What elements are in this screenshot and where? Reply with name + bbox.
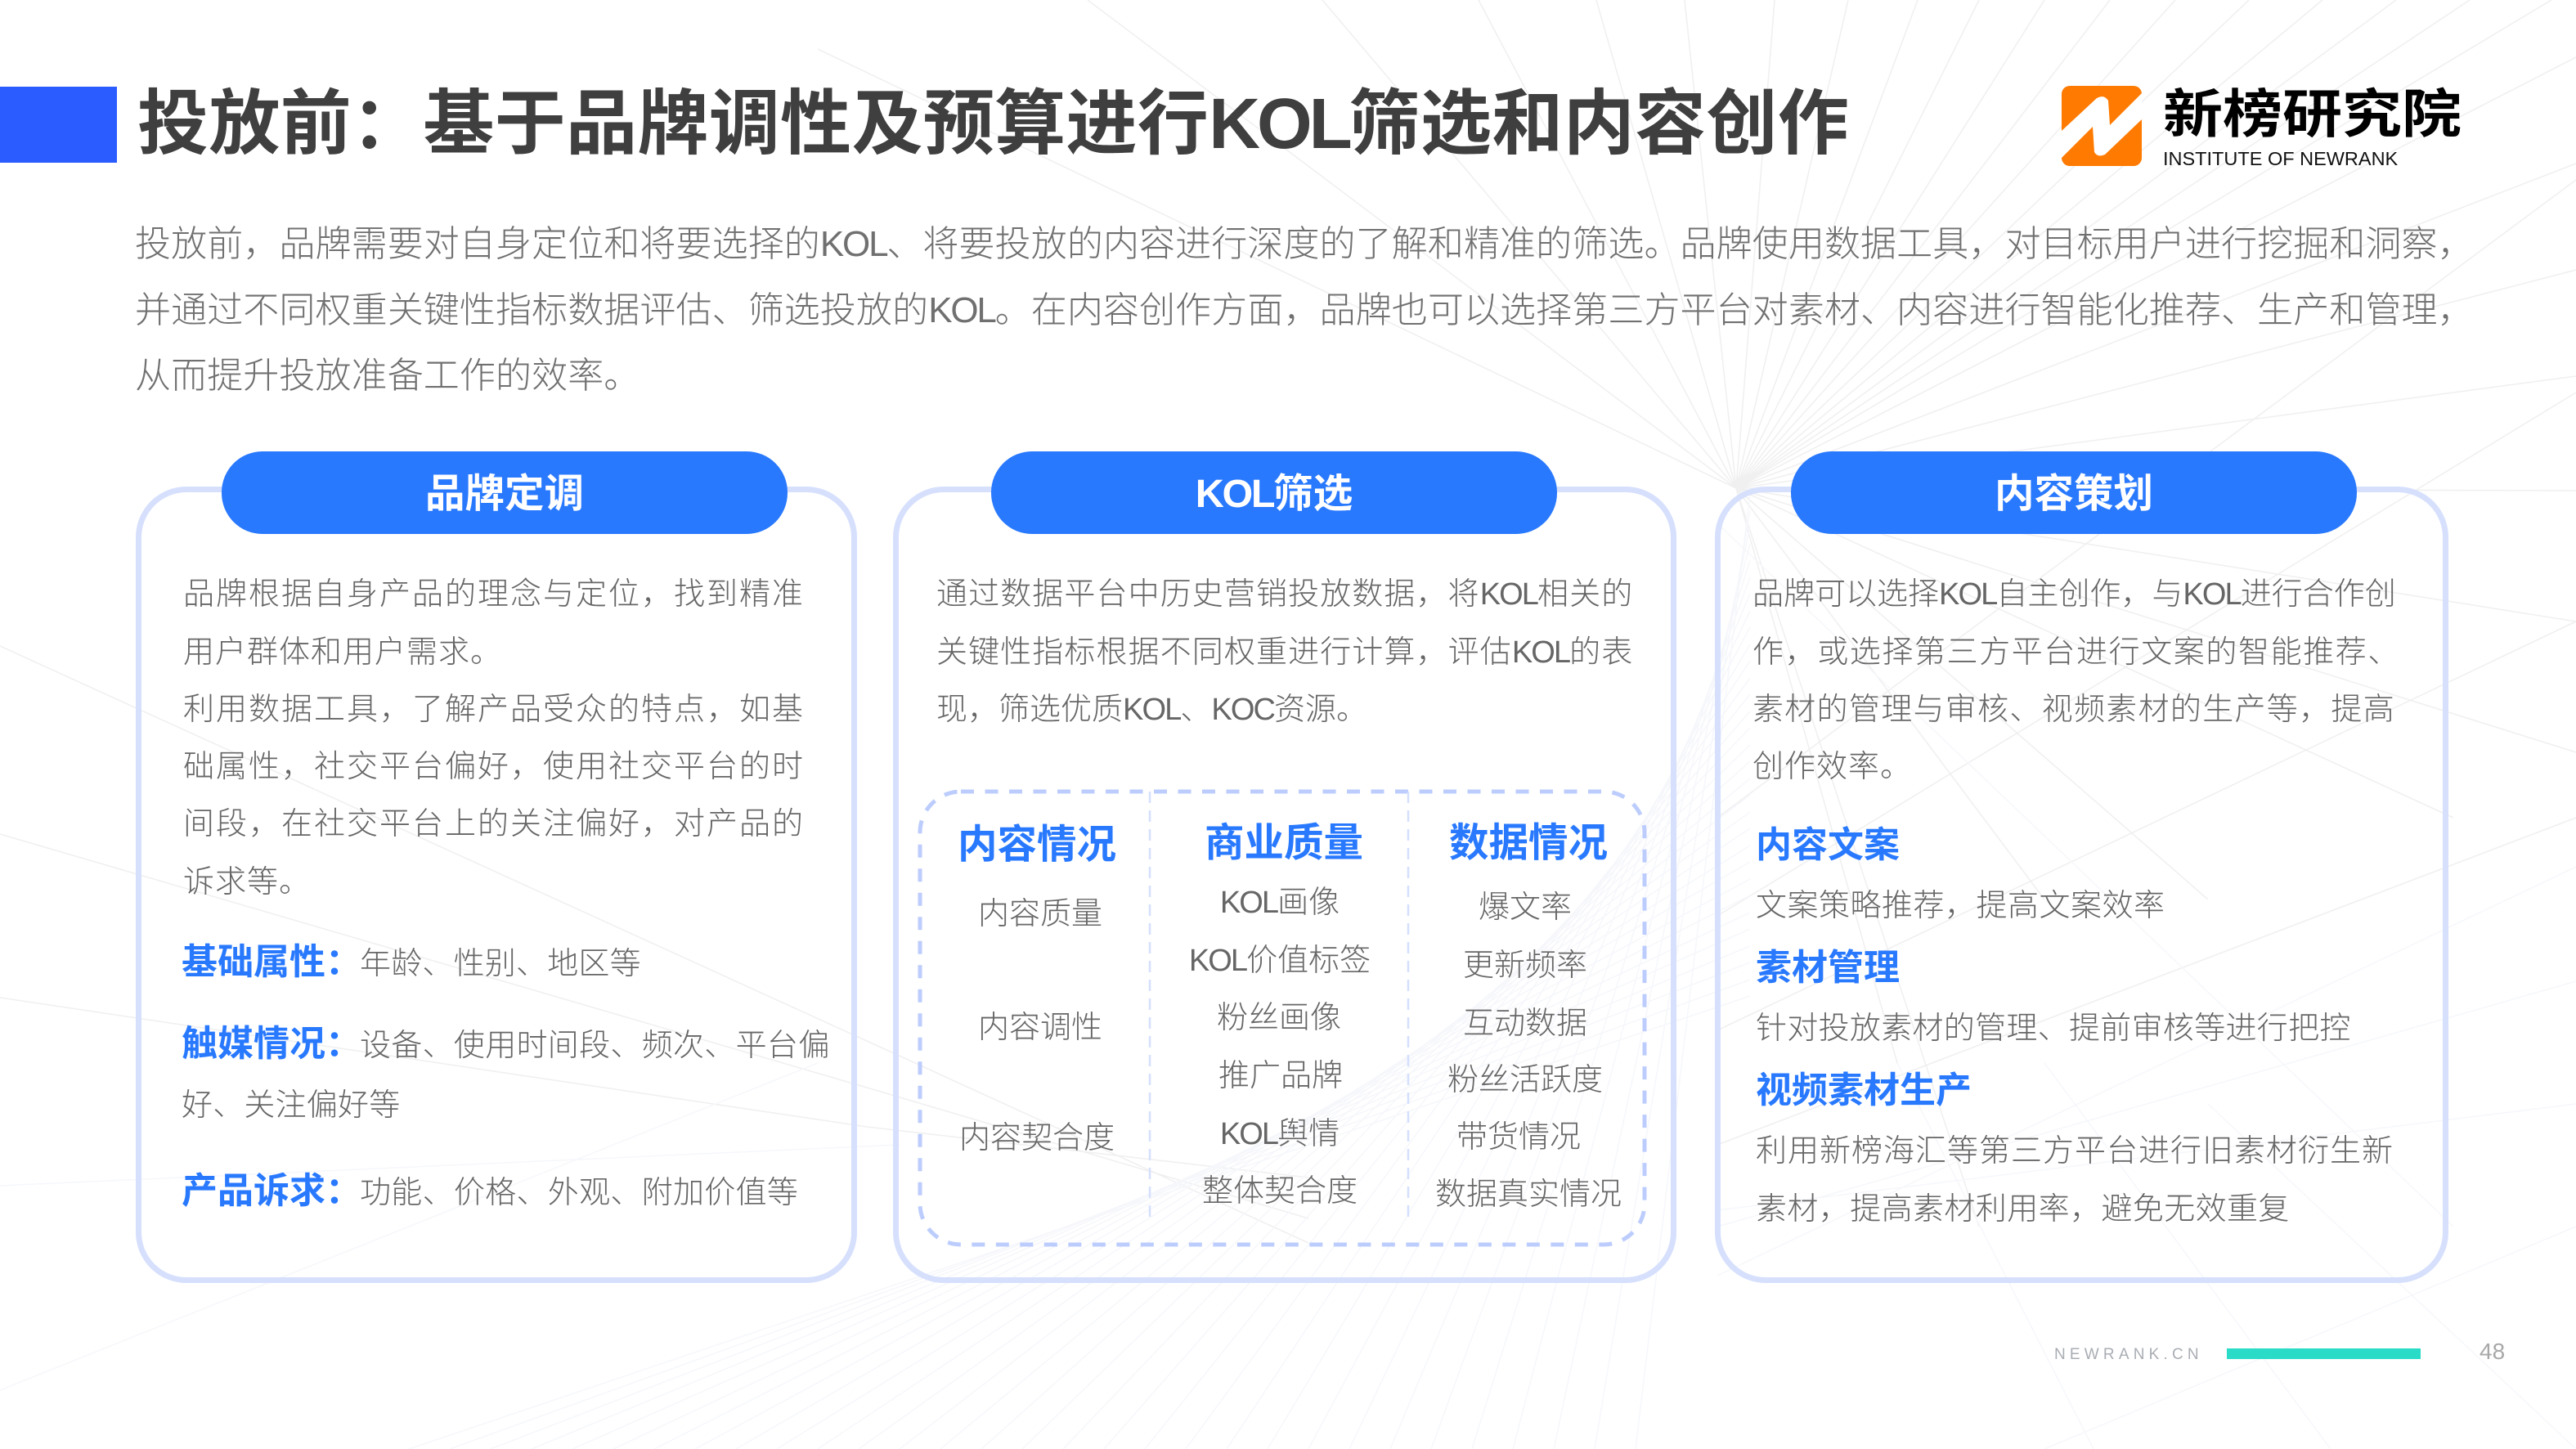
text block: brand description — [183, 577, 805, 899]
text: 触媒情况: 触媒情况： — [182, 1024, 361, 1064]
text block: brand description: 品牌根据自身产品的理念与定位，找到精准 — [183, 577, 805, 612]
text block: brand description: 间段，在社交平台上的关注偏好，对产品的 — [183, 807, 805, 841]
section: 素材管理 — [1756, 948, 2351, 1046]
text block: KOL screening description: 现，筛选优质KOL、KOC资源。 — [936, 693, 1367, 727]
section: 内容文案: 内容文案 — [1756, 825, 1900, 865]
text block: content planning description: 素材的管理与审核、视频素材的生产等，提高 — [1752, 693, 2395, 727]
column: 商业质量 — [1189, 821, 1371, 1209]
text block: brand description: 用户群体和用户需求。 — [183, 635, 502, 670]
footer: teal progress bar — [2227, 1348, 2421, 1359]
section: 素材管理: 针对投放素材的管理、提前审核等进行把控 — [1756, 1012, 2351, 1046]
column: 数据情况: 数据情况 — [1449, 821, 1608, 865]
panel heading pill: 品牌定调 — [222, 451, 788, 534]
text: 触媒情况: 好、关注偏好等 — [182, 1088, 400, 1123]
column: 商业质量: 粉丝画像 — [1217, 1001, 1341, 1035]
column: 数据情况: 数据真实情况 — [1435, 1178, 1622, 1212]
panel heading pill: 内容策划 — [1791, 451, 2357, 534]
text block: brand description: 础属性，社交平台偏好，使用社交平台的时 — [183, 750, 805, 784]
logo: Institute of Newrank — [2062, 86, 2462, 169]
panel: KOL筛选 — [893, 451, 1676, 1283]
panel heading pill: KOL筛选: KOL筛选 — [1196, 472, 1353, 516]
column: 数据情况: 带货情况 — [1456, 1120, 1581, 1155]
intro paragraph: 并通过不同权重关键性指标数据评估、筛选投放的KOL。在内容创作方面，品牌也可以选择第三方平台对素材、内容进行智能化推荐、生产和管理， — [135, 290, 2474, 330]
panel heading pill: 品牌定调: 品牌定调 — [425, 472, 584, 516]
text: 基础属性 — [182, 942, 641, 982]
footer: page number: 48 — [2480, 1339, 2505, 1364]
footer: site name: NEWRANK.CN — [2054, 1346, 2203, 1363]
column: 内容情况: 内容调性 — [978, 1011, 1102, 1045]
column: 内容情况: 内容质量 — [978, 897, 1102, 931]
title accent bar — [0, 87, 117, 163]
text: 产品诉求 — [182, 1171, 798, 1211]
column: 商业质量: 整体契合度 — [1202, 1174, 1358, 1209]
text block: KOL screening description: 关键性指标根据不同权重进行计算，评估KOL的表 — [936, 635, 1633, 670]
column: 商业质量: 商业质量 — [1205, 821, 1363, 865]
text block: brand description: 诉求等。 — [183, 865, 311, 899]
column: 数据情况: 爆文率 — [1479, 890, 1572, 925]
text: 基础属性: 基础属性： — [182, 942, 361, 982]
section: 视频素材生产: 素材，提高素材利用率，避免无效重复 — [1756, 1192, 2290, 1227]
text block: KOL screening description: 通过数据平台中历史营销投放数据，将KOL相关的 — [936, 577, 1633, 612]
column: 商业质量: KOL舆情 — [1220, 1117, 1340, 1151]
column: 数据情况: 粉丝活跃度 — [1447, 1063, 1603, 1097]
intro paragraph: 投放前，品牌需要对自身定位和将要选择的KOL、将要投放的内容进行深度的了解和精准的筛选。品牌使用数据工具，对目标用户进行挖掘和洞察， — [135, 224, 2474, 264]
column: 数据情况 — [1435, 821, 1622, 1212]
panel: 内容策划 — [1715, 451, 2448, 1283]
text block: content planning description: 品牌可以选择KOL自主创作，与KOL进行合作创 — [1752, 577, 2396, 612]
section: 素材管理: 素材管理 — [1756, 948, 1900, 988]
panel: 品牌定调 — [136, 451, 857, 1283]
column: 内容情况: 内容情况 — [958, 823, 1116, 867]
column: 内容情况: 内容契合度 — [959, 1121, 1115, 1155]
section: 视频素材生产: 视频素材生产 — [1756, 1070, 1972, 1110]
icon: orange N mark — [2062, 86, 2142, 166]
intro paragraph — [135, 224, 2474, 396]
text: 触媒情况: 设备、使用时间段、频次、平台偏 — [360, 1029, 830, 1063]
text block: brand description: 利用数据工具，了解产品受众的特点，如基 — [183, 693, 805, 727]
text block: content planning description: 作，或选择第三方平台进行文案的智能推荐、 — [1752, 635, 2400, 670]
intro paragraph: 从而提升投放准备工作的效率。 — [135, 356, 640, 396]
text: 产品诉求: 产品诉求： — [182, 1171, 361, 1211]
title: 投放前：基于品牌调性及预算进行KOL筛选和内容创作 — [137, 84, 1849, 164]
logo wordmark: 新榜研究院 — [2163, 86, 2462, 144]
text: 基础属性: 年龄、性别、地区等 — [360, 947, 641, 981]
panel heading pill: 内容策划: 内容策划 — [1995, 472, 2153, 516]
panel heading pill: KOL筛选 — [991, 451, 1557, 534]
column: 数据情况: 更新频率 — [1463, 949, 1587, 983]
dashed table: KOL indicators — [918, 790, 1647, 1246]
section: 视频素材生产: 利用新榜海汇等第三方平台进行旧素材衍生新 — [1756, 1134, 2394, 1169]
text block: content planning description — [1752, 577, 2400, 784]
column: 商业质量: KOL画像 — [1220, 886, 1340, 920]
column: 商业质量: 推广品牌 — [1218, 1059, 1343, 1093]
section: 视频素材生产 — [1756, 1070, 2394, 1227]
column: 商业质量: KOL价值标签 — [1189, 944, 1371, 978]
section: 内容文案 — [1756, 825, 2165, 923]
logo subtitle: INSTITUTE OF NEWRANK — [2163, 148, 2398, 169]
column: 内容情况 — [958, 823, 1116, 1155]
text: 产品诉求: 功能、价格、外观、附加价值等 — [360, 1176, 798, 1210]
text block: KOL screening description — [936, 577, 1633, 727]
text: 触媒情况 — [182, 1024, 830, 1123]
text block: content planning description: 创作效率。 — [1752, 750, 1912, 784]
section: 内容文案: 文案策略推荐，提高文案效率 — [1756, 889, 2165, 923]
column: 数据情况: 互动数据 — [1463, 1007, 1587, 1041]
